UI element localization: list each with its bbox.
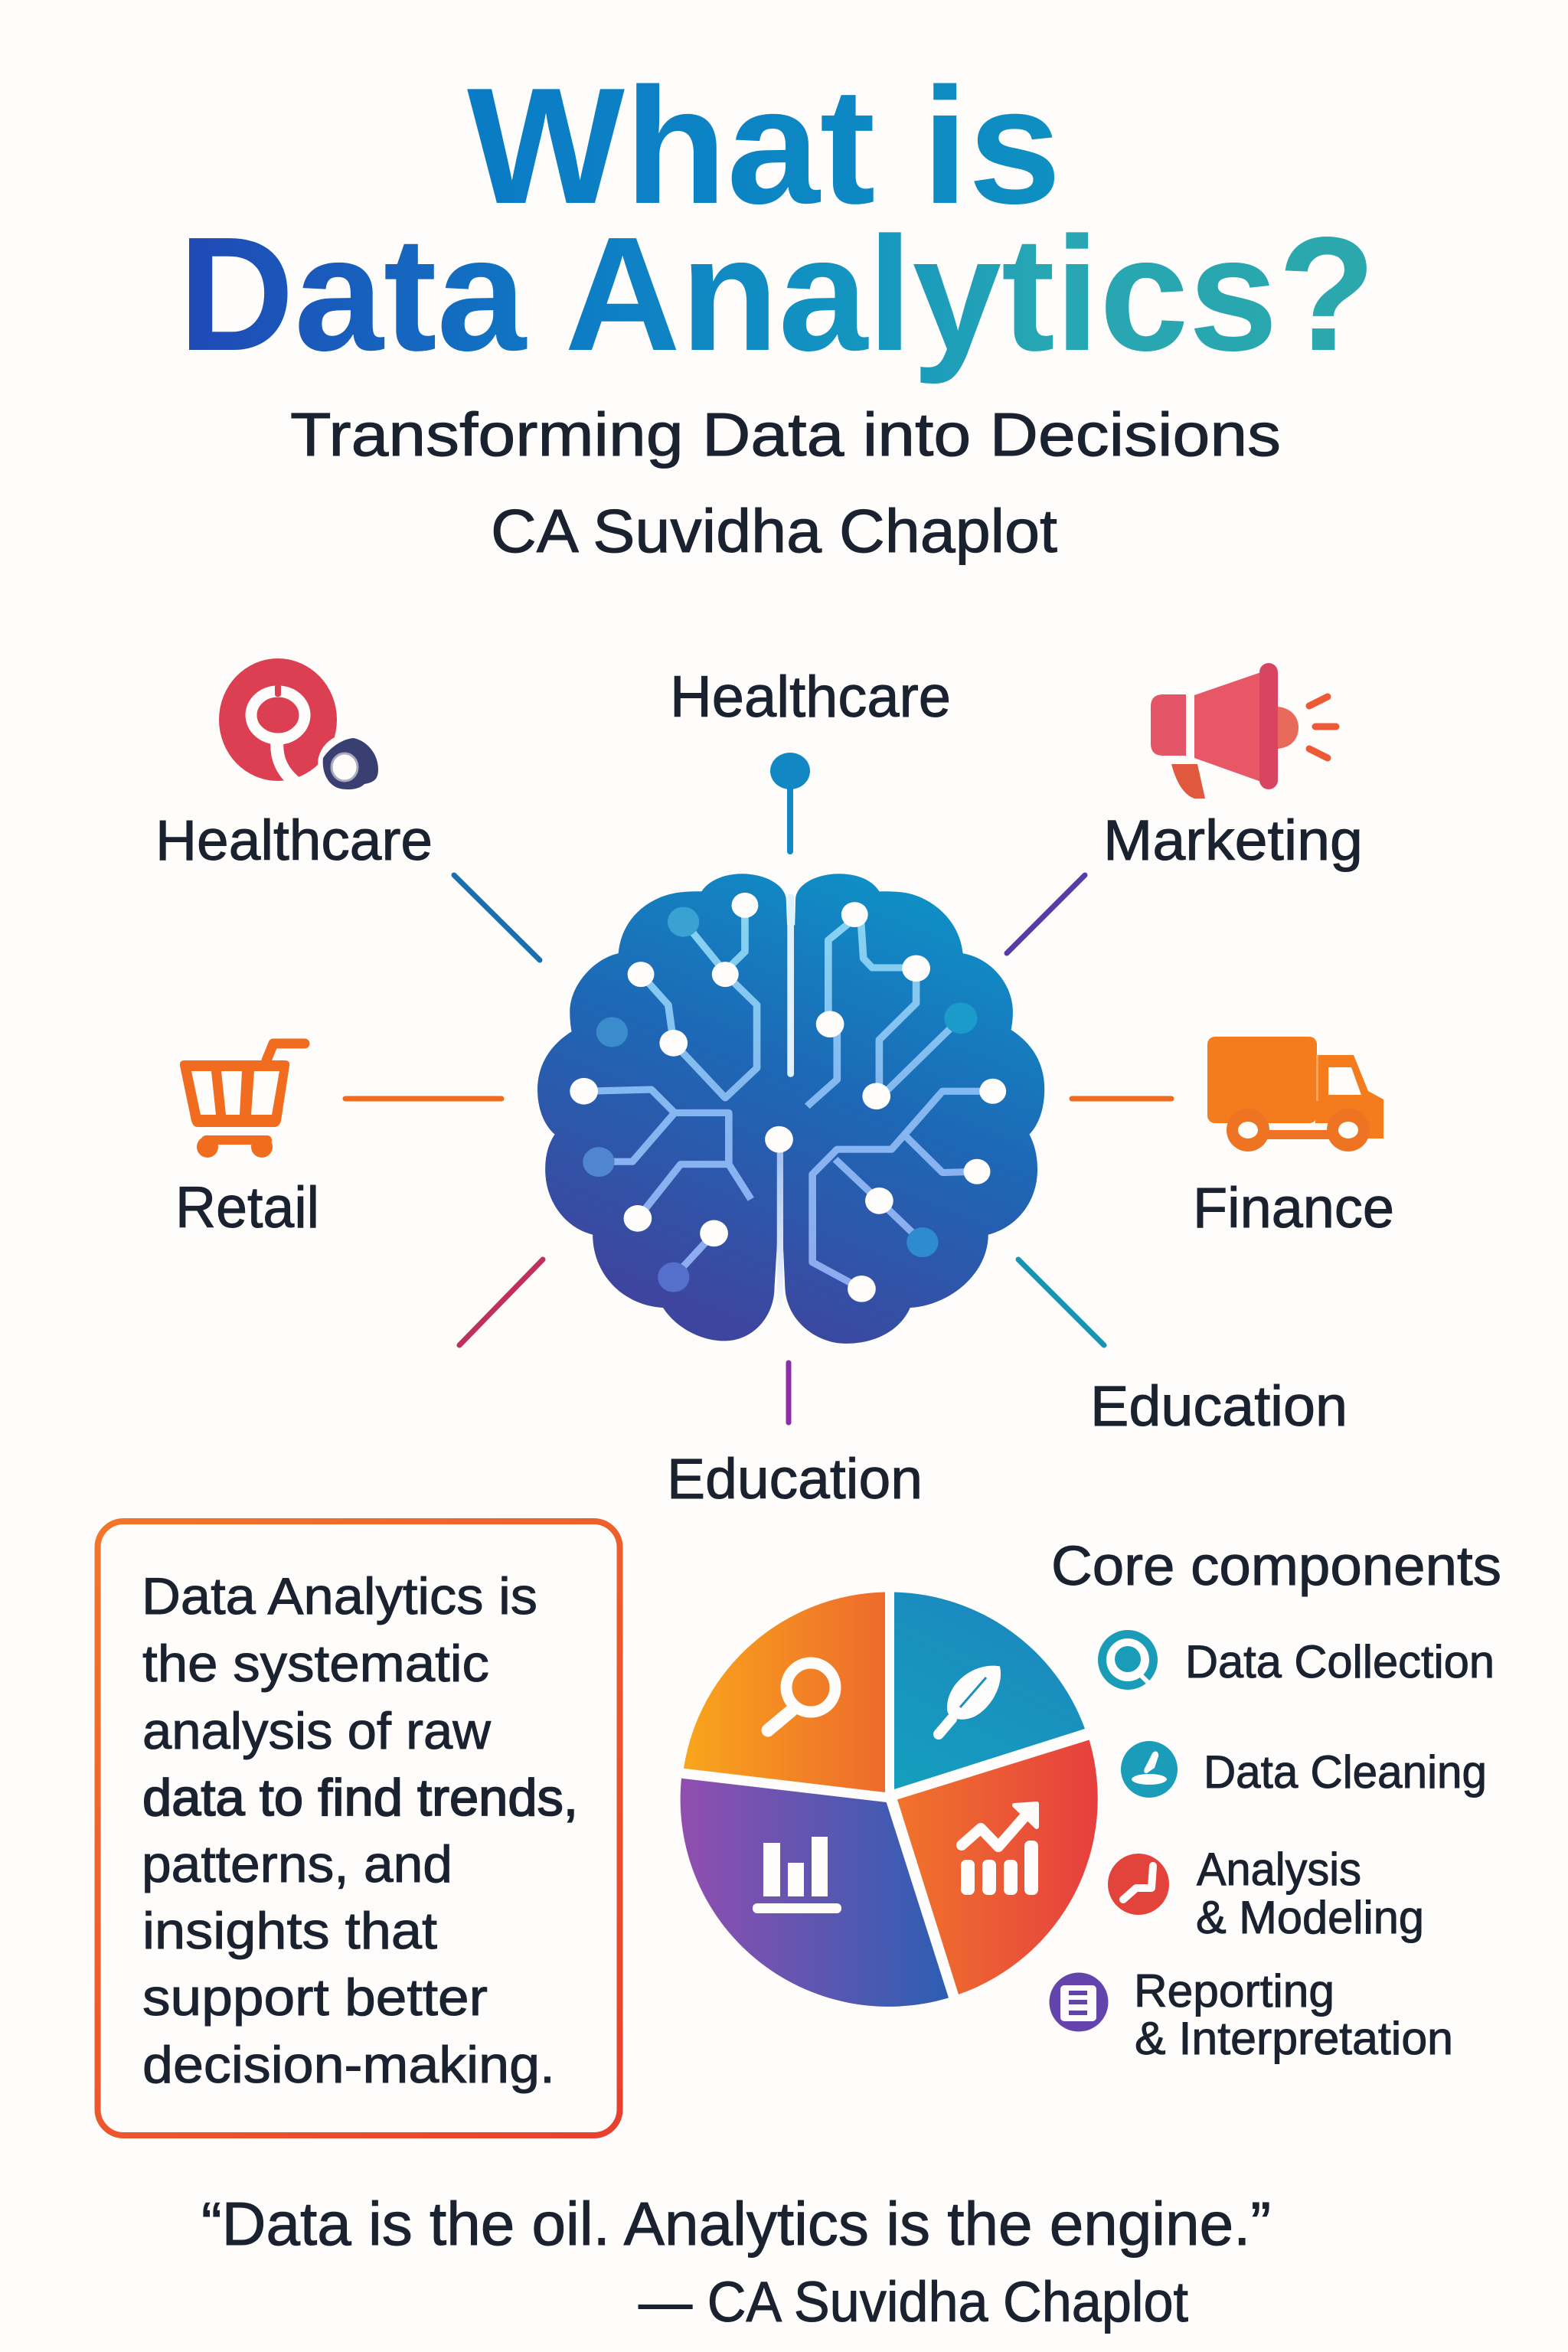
- icon: marketing megaphone: [1151, 663, 1336, 799]
- legend: analysis and modeling: & Modeling: [1196, 1892, 1424, 1943]
- connector: right: [1072, 1096, 1171, 1101]
- connector: top pin: [770, 753, 810, 851]
- subtitle: Transforming Data into Decisions: [290, 400, 1281, 469]
- icon: brain with circuit traces: [537, 874, 1044, 1344]
- legend: analysis and modeling: [1108, 1844, 1424, 1943]
- definition text: the systematic: [142, 1635, 489, 1693]
- definition text: insights that: [142, 1902, 437, 1960]
- legend: reporting and interpretation: Reporting: [1134, 1965, 1334, 2017]
- author line: CA Suvidha Chaplot: [491, 497, 1057, 565]
- label: healthcare left: Healthcare: [155, 808, 433, 872]
- legend: reporting and interpretation: & Interpretation: [1135, 2013, 1453, 2064]
- connector: lower left: [459, 1259, 543, 1345]
- legend: data collection: Data Collection: [1185, 1636, 1494, 1687]
- definition text: data to find trends,: [142, 1769, 578, 1827]
- label: education right: Education: [1090, 1374, 1348, 1438]
- pie slice: analysis: [897, 1740, 1098, 1994]
- definition text: decision-making.: [142, 2036, 555, 2094]
- connector: lower right: [1018, 1259, 1104, 1345]
- legend: data collection: [1098, 1630, 1494, 1690]
- legend: analysis and modeling: Analysis: [1197, 1844, 1361, 1895]
- legend: data cleaning: [1121, 1741, 1487, 1798]
- connector: bottom: [786, 1363, 792, 1423]
- label: education bottom: Education: [667, 1447, 923, 1511]
- pie slice: data cleaning: [894, 1592, 1085, 1789]
- pie chart: core components: [681, 1592, 1098, 2007]
- heading: core components: Core components: [1051, 1536, 1501, 1597]
- pie slice: reporting: [681, 1779, 949, 2007]
- definition text: [142, 1567, 578, 2094]
- panel: definition callout: [98, 1521, 620, 2135]
- title: Data Analytics?: [178, 203, 1376, 384]
- icon: finance truck: [1207, 1037, 1383, 1152]
- connector: upper left: [454, 875, 540, 960]
- label: retail: Retail: [175, 1175, 319, 1240]
- title: What is: [467, 53, 1061, 238]
- quote: “Data is the oil. Analytics is the engine.”: [201, 2190, 1271, 2258]
- label: finance: Finance: [1193, 1176, 1394, 1240]
- legend: reporting and interpretation: [1049, 1965, 1453, 2064]
- definition text: analysis of raw: [142, 1702, 492, 1760]
- definition text: support better: [142, 1968, 488, 2027]
- title: [178, 53, 1376, 384]
- connector: upper right: [1007, 875, 1085, 953]
- label: healthcare top: Healthcare: [670, 665, 951, 730]
- legend: data cleaning: Data Cleaning: [1204, 1746, 1487, 1798]
- icon: retail cart: [180, 1044, 305, 1158]
- connector: left: [345, 1096, 501, 1101]
- icon: healthcare stethoscope: [219, 658, 384, 795]
- definition text: patterns, and: [142, 1835, 452, 1893]
- definition text: Data Analytics is: [142, 1567, 537, 1625]
- label: marketing: Marketing: [1103, 808, 1363, 872]
- pie slice: data collection: [684, 1592, 885, 1792]
- quote attribution: — CA Suvidha Chaplot: [639, 2270, 1188, 2334]
